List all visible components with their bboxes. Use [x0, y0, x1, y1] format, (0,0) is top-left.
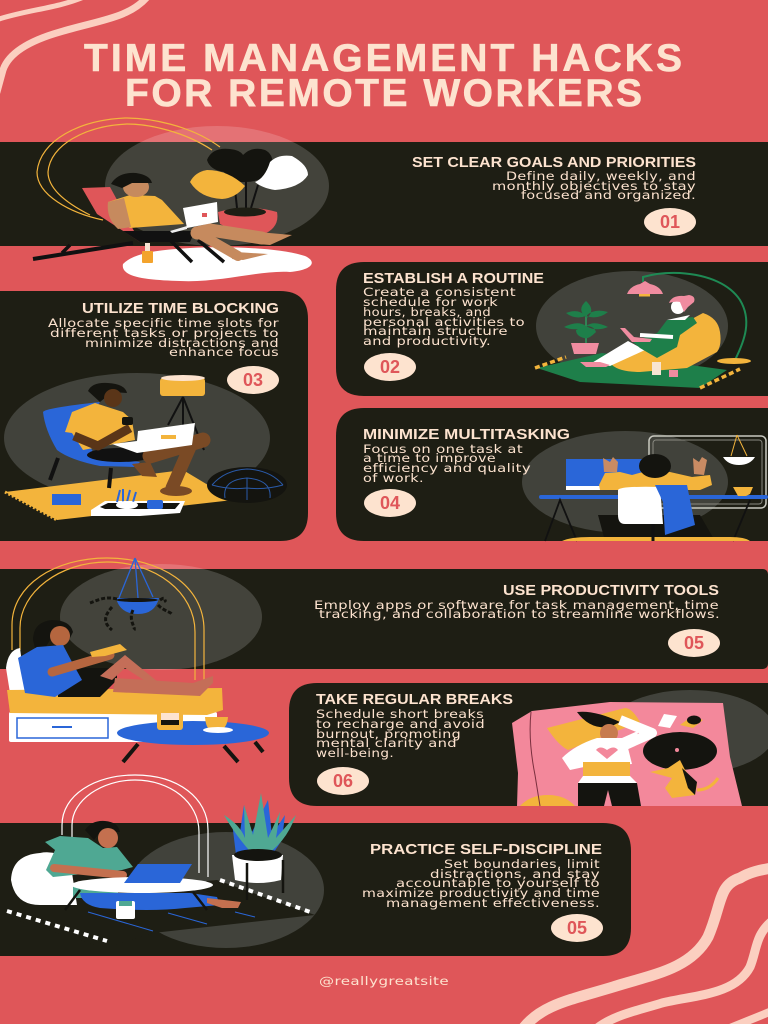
number badge: 04 — [380, 493, 400, 513]
panel: use productivity tools — [0, 558, 768, 762]
body text: Set boundaries, limit — [444, 857, 600, 871]
footer: website handle: @reallygreatsite — [319, 974, 449, 988]
illustration: woman on deck chair — [33, 118, 329, 281]
number badge: 01 — [660, 212, 680, 232]
body text: Create a consistent — [363, 285, 516, 299]
body text: focused and organized. — [521, 188, 696, 202]
illustration: man with laptop in chair — [4, 373, 287, 520]
panel: practice self-discipline — [0, 775, 631, 956]
number badge: 05 — [567, 918, 587, 938]
body text — [363, 442, 531, 485]
body text: burnout, promoting — [316, 727, 461, 741]
number badge: 06 — [333, 771, 353, 791]
body text: Schedule short breaks — [316, 707, 484, 721]
body text — [492, 169, 696, 202]
panel: establish a routine — [336, 262, 768, 396]
body text — [316, 707, 485, 760]
illustration: woman lying on bed with cat — [512, 690, 768, 806]
heading: USE PRODUCTIVITY TOOLS — [503, 582, 719, 599]
body text — [314, 598, 720, 621]
heading: MINIMIZE MULTITASKING — [363, 426, 570, 443]
body text: accountable to yourself to — [396, 876, 600, 890]
body text: mental clarity and — [316, 736, 457, 750]
body text: management effectiveness. — [386, 896, 600, 910]
body text: tracking, and collaboration to streamline workflows. — [319, 607, 720, 621]
body text: Define daily, weekly, and — [506, 169, 696, 183]
body text: monthly objectives to stay — [492, 179, 696, 193]
title — [84, 37, 682, 115]
number badge — [668, 629, 720, 657]
heading: PRACTICE SELF-DISCIPLINE — [370, 841, 602, 858]
body text: efficiency and quality — [363, 461, 531, 475]
body text: and productivity. — [363, 334, 491, 348]
body text — [48, 316, 279, 359]
body text: hours, breaks, and — [363, 305, 491, 319]
body text: different tasks or projects to — [50, 326, 279, 340]
heading: UTILIZE TIME BLOCKING — [82, 300, 279, 317]
title: FOR REMOTE WORKERS — [125, 72, 642, 115]
number badge: 05 — [684, 633, 704, 653]
body text: Focus on one task at — [363, 442, 523, 456]
heading: TAKE REGULAR BREAKS — [316, 691, 513, 708]
decoration: top-left curves — [0, 0, 148, 92]
panel: set clear goals — [0, 118, 768, 281]
heading: SET CLEAR GOALS AND PRIORITIES — [412, 154, 696, 171]
body text: maximize productivity and time — [362, 886, 600, 900]
body text: a time to improve — [363, 451, 496, 465]
number badge — [317, 767, 369, 795]
number badge: 03 — [243, 370, 263, 390]
number badge — [644, 208, 696, 236]
number badge: 02 — [380, 357, 400, 377]
number badge — [364, 489, 416, 517]
body text: to recharge and avoid — [316, 717, 485, 731]
body text: personal activities to — [363, 315, 525, 329]
body text — [363, 285, 525, 348]
body text: of work. — [363, 471, 424, 485]
number badge — [551, 914, 603, 942]
illustration: woman on beanbag — [535, 271, 751, 388]
illustration: man at desk from behind — [522, 431, 768, 541]
panel: minimize multitasking — [336, 408, 768, 541]
body text — [362, 857, 600, 910]
number badge — [227, 366, 279, 394]
body text: Employ apps or software for task management, time — [314, 598, 719, 612]
body text: maintain structure — [363, 324, 508, 338]
body text: minimize distractions and — [85, 336, 279, 350]
panel: utilize time blocking — [0, 291, 308, 541]
heading: ESTABLISH A ROUTINE — [363, 270, 544, 287]
illustration: woman reading on daybed — [6, 558, 269, 762]
body text: enhance focus — [169, 345, 279, 359]
body text: Allocate specific time slots for — [48, 316, 279, 330]
title: TIME MANAGEMENT HACKS — [84, 37, 682, 80]
body text: distractions, and stay — [430, 867, 600, 881]
decoration: bottom-right curves — [522, 868, 768, 1024]
illustration: man with laptop on floor — [0, 775, 324, 948]
number badge — [364, 353, 416, 381]
body text: well-being. — [316, 746, 394, 760]
panel: take regular breaks — [289, 683, 768, 806]
body text: schedule for work — [363, 295, 498, 309]
